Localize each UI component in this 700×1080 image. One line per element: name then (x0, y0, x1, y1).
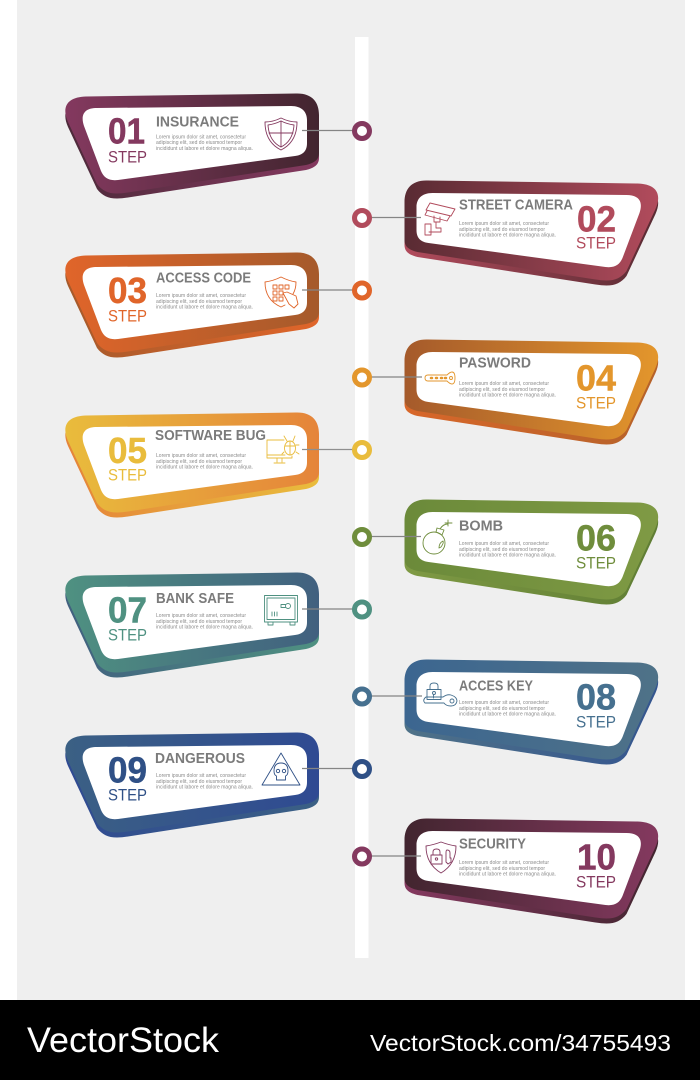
connector 07 (302, 608, 353, 610)
heading street camera: STREET CAMERA (459, 198, 573, 214)
icon: skull warning (262, 753, 300, 785)
node 06 (354, 530, 370, 544)
node 10 (354, 849, 370, 864)
description 02: adipiscing elit, sed do eiusmod tempor (459, 227, 545, 233)
description 02 (459, 221, 556, 239)
number 03: 03 (108, 270, 147, 311)
description 10: Lorem ipsum dolor sit amet, consectetur (459, 860, 549, 866)
description 02: incididunt ut labore et dolore magna aliqua. (459, 233, 556, 239)
number 02: 02 (577, 198, 616, 240)
connector 02 (371, 216, 421, 218)
node 02 (354, 210, 370, 226)
step 06 card: bomb (354, 499, 658, 604)
description 04: adipiscing elit, sed do eiusmod tempor (459, 387, 545, 393)
node 09 (354, 762, 370, 776)
description 02: Lorem ipsum dolor sit amet, consectetur (459, 221, 549, 227)
icon: keypad shield (265, 277, 298, 308)
icon: camera (425, 203, 455, 235)
heading security: SECURITY (459, 836, 526, 852)
icon: security shield (426, 842, 456, 873)
label step 02: STEP (576, 234, 616, 252)
description 08: Lorem ipsum dolor sit amet, consectetur (459, 700, 549, 706)
connector 04 (371, 376, 422, 378)
description 06: Lorem ipsum dolor sit amet, consectetur (459, 541, 549, 547)
node 03 (354, 283, 370, 298)
description 09 (156, 773, 253, 791)
node 01 (354, 124, 370, 138)
description 08 (459, 700, 556, 718)
heading bomb: BOMB (459, 518, 503, 534)
label step 08: STEP (576, 712, 616, 732)
number 07: 07 (108, 590, 147, 630)
heading bank safe: BANK SAFE (156, 591, 234, 607)
description 09: incididunt ut labore et dolore magna aliqua. (156, 785, 253, 791)
footer bar (0, 1000, 700, 1080)
icon: bomb (423, 520, 452, 554)
description 08: adipiscing elit, sed do eiusmod tempor (459, 706, 545, 712)
step 09 card: dangerous (65, 732, 369, 837)
label step 10: STEP (576, 872, 616, 892)
heading access key: ACCES KEY (459, 678, 533, 694)
icon: lock and key (424, 683, 457, 706)
heading insurance: INSURANCE (156, 114, 239, 130)
heading access code: ACCESS CODE (156, 270, 251, 286)
description 10: incididunt ut labore et dolore magna aliqua. (459, 872, 556, 878)
label step 04: STEP (576, 394, 616, 412)
description 01: incididunt ut labore et dolore magna aliqua. (156, 146, 253, 152)
number 09: 09 (108, 750, 147, 790)
description 03: Lorem ipsum dolor sit amet, consectetur (156, 293, 246, 299)
description 07 (156, 613, 253, 631)
description 06: adipiscing elit, sed do eiusmod tempor (459, 547, 545, 553)
number 08: 08 (576, 676, 616, 718)
label step 03: STEP (108, 306, 147, 326)
description 10 (459, 860, 556, 878)
icon: safe (264, 596, 298, 625)
connector 03 (302, 289, 353, 291)
description 07: Lorem ipsum dolor sit amet, consectetur (156, 613, 246, 619)
description 04: Lorem ipsum dolor sit amet, consectetur (459, 381, 549, 387)
heading software bug: SOFTWARE BUG (155, 428, 266, 444)
description 01: adipiscing elit, sed do eiusmod tempor (156, 140, 242, 146)
heading password: PASWORD (459, 356, 531, 372)
label step 07: STEP (108, 626, 147, 644)
step 08 card: access key (354, 659, 658, 764)
number 04: 04 (576, 358, 616, 398)
number 05: 05 (108, 430, 147, 471)
description 01 (156, 134, 253, 152)
label step 01: STEP (108, 148, 147, 166)
connector 08 (371, 695, 422, 697)
node 05 (354, 442, 370, 458)
connector 01 (302, 130, 353, 132)
description 06 (459, 541, 556, 559)
description 07: incididunt ut labore et dolore magna aliqua. (156, 625, 253, 631)
description 08: incididunt ut labore et dolore magna aliqua. (459, 712, 556, 718)
step 03 card: access code (65, 252, 369, 357)
connector 06 (371, 536, 421, 538)
node 07 (354, 602, 370, 617)
description 05: incididunt ut labore et dolore magna aliqua. (156, 465, 253, 471)
connector 10 (371, 855, 421, 857)
heading dangerous: DANGEROUS (155, 751, 245, 767)
description 05 (156, 453, 253, 471)
icon: shield (265, 118, 297, 150)
description 09: adipiscing elit, sed do eiusmod tempor (156, 779, 242, 785)
number 01: 01 (108, 110, 145, 152)
description 05: Lorem ipsum dolor sit amet, consectetur (156, 453, 246, 459)
step 02 card: street camera (354, 180, 658, 285)
connector 09 (302, 768, 353, 770)
description 05: adipiscing elit, sed do eiusmod tempor (156, 459, 242, 465)
description 10: adipiscing elit, sed do eiusmod tempor (459, 866, 545, 872)
description 03: adipiscing elit, sed do eiusmod tempor (156, 299, 242, 305)
footer image id: VectorStock.com/34755493 (370, 1030, 671, 1056)
step 04 card: password (354, 339, 658, 444)
step 10 card: security (354, 818, 658, 923)
description 09: Lorem ipsum dolor sit amet, consectetur (156, 773, 246, 779)
label step 05: STEP (108, 466, 147, 484)
icon: monitor bug (267, 436, 299, 463)
central timeline bar (355, 37, 368, 958)
description 06: incididunt ut labore et dolore magna aliqua. (459, 553, 556, 559)
node 04 (354, 370, 370, 385)
description 04: incididunt ut labore et dolore magna aliqua. (459, 393, 556, 399)
description 03 (156, 293, 253, 311)
description 04 (459, 381, 556, 399)
description 01: Lorem ipsum dolor sit amet, consectetur (156, 134, 246, 140)
label step 06: STEP (576, 554, 616, 572)
number 06: 06 (576, 518, 616, 558)
footer brand: VectorStock (27, 1021, 220, 1060)
description 03: incididunt ut labore et dolore magna aliqua. (156, 305, 253, 311)
connector 05 (302, 448, 353, 450)
step 01 card: insurance (65, 93, 369, 198)
number 10: 10 (577, 836, 616, 878)
description 07: adipiscing elit, sed do eiusmod tempor (156, 619, 242, 625)
step 07 card: bank safe (65, 572, 369, 677)
step 05 card: software bug (65, 412, 369, 517)
icon: password key (425, 372, 455, 384)
label step 09: STEP (108, 786, 147, 804)
node 08 (354, 689, 370, 704)
